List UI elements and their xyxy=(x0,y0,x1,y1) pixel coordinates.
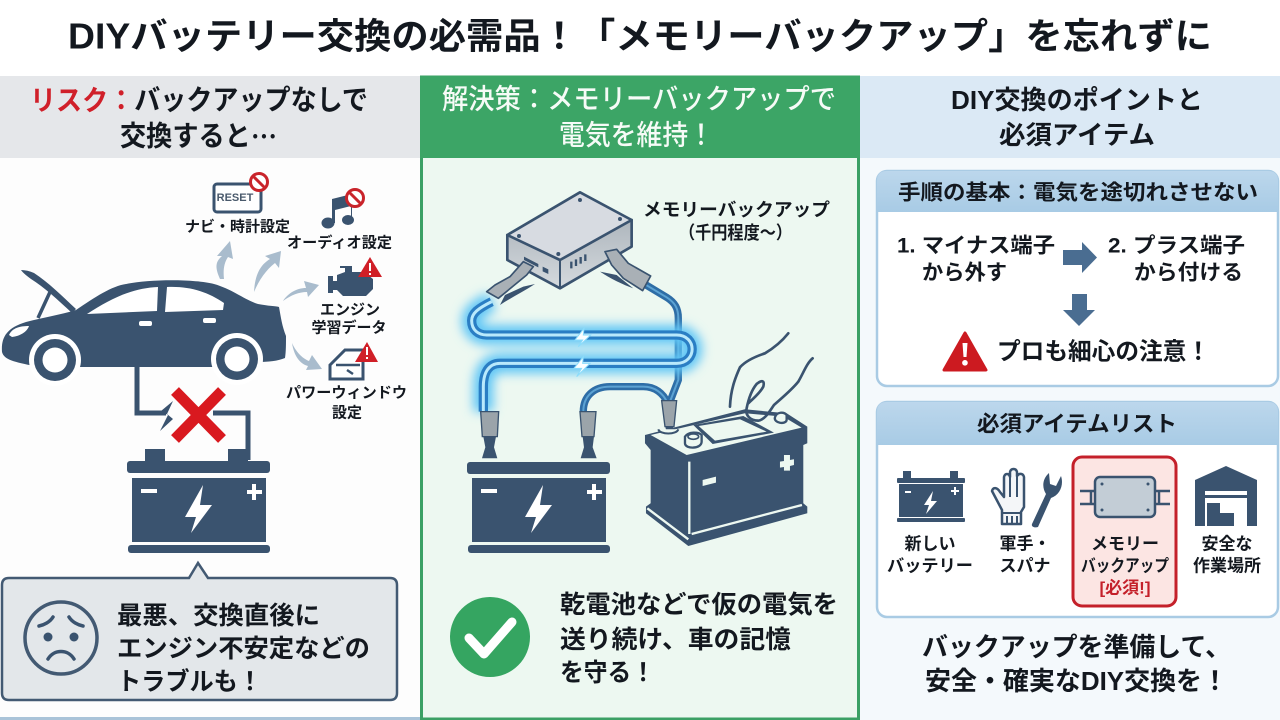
solution text: 乾電池などで仮の電気を xyxy=(560,591,838,619)
label: power window xyxy=(286,384,407,422)
item: new battery: バッテリー xyxy=(887,556,973,576)
right clamp xyxy=(600,272,633,288)
icon: sad face xyxy=(25,602,97,674)
caution text: プロも細心の注意！ xyxy=(997,338,1210,366)
items heading: 必須アイテムリスト xyxy=(977,412,1177,436)
DIY heading: DIY交換のポイントと xyxy=(951,85,1203,115)
item: safe workplace: 作業場所 xyxy=(1193,556,1261,576)
isometric battery with hand xyxy=(645,333,813,546)
card: procedure xyxy=(877,171,1278,386)
items heading xyxy=(877,402,1278,445)
item: gloves and wrench: 軍手・ xyxy=(1000,534,1050,554)
callout: worst case xyxy=(2,563,397,700)
solution text: を守る！ xyxy=(560,659,655,687)
solution heading: 電気を維持！ xyxy=(559,120,714,150)
label: memory backup xyxy=(643,200,830,243)
step 1 xyxy=(897,234,1055,284)
title: DIYバッテリー交換の必需品！「メモリーバックアップ」を忘れずに xyxy=(68,16,1212,56)
label: engine learning data: エンジン xyxy=(320,302,380,318)
label: audio: オーディオ設定 xyxy=(287,234,392,252)
step 1: から外す xyxy=(922,262,1007,284)
panel: solution xyxy=(420,76,860,719)
solution heading xyxy=(420,76,860,158)
solution text: 送り続け、車の記憶 xyxy=(560,626,791,654)
item: new battery: 新しい xyxy=(904,534,956,554)
label: engine learning data xyxy=(311,302,387,336)
item: gloves and wrench: スパナ xyxy=(1000,556,1050,576)
item: memory backup highlighted: [必須!] xyxy=(1100,578,1150,598)
step 2: から付ける xyxy=(1134,262,1243,284)
label: navigation and clock: ナビ・時計設定 xyxy=(185,218,290,236)
arrow: right xyxy=(1063,242,1097,273)
left clamp xyxy=(500,284,535,305)
icon: reset screen: RESET xyxy=(217,192,254,204)
procedure heading xyxy=(877,171,1278,212)
closing message: バックアップを準備して、 xyxy=(922,632,1231,662)
device body xyxy=(507,220,632,288)
risk heading xyxy=(0,76,420,158)
label: power window: パワーウィンドウ xyxy=(286,384,407,402)
callout: worst case: エンジン不安定などの xyxy=(117,635,370,663)
card: required items xyxy=(877,402,1278,617)
icon: warning xyxy=(944,333,986,370)
label: engine learning data: 学習データ xyxy=(311,318,387,336)
risk heading: 交換すると… xyxy=(120,116,277,156)
callout: worst case: トラブルも！ xyxy=(117,667,262,696)
DIY heading: 必須アイテム xyxy=(999,120,1155,150)
title xyxy=(0,0,1280,75)
item: memory backup highlighted: メモリー xyxy=(1091,534,1159,554)
label: memory backup: メモリーバックアップ xyxy=(643,200,830,220)
item: memory backup highlighted xyxy=(1073,457,1176,606)
icon: check circle xyxy=(450,597,530,677)
item: safe workplace: 安全な xyxy=(1202,534,1252,554)
car battery xyxy=(127,449,270,553)
step 2 xyxy=(1108,234,1245,284)
memory backup cables and device xyxy=(472,192,692,458)
solution text xyxy=(560,591,838,687)
car silhouette with open hood xyxy=(2,270,286,386)
plain cables xyxy=(583,283,678,412)
solution heading: 解決策：メモリーバックアップで xyxy=(442,84,836,114)
icon: music notes xyxy=(322,190,364,228)
callout: worst case: 最悪、交換直後に xyxy=(117,602,320,630)
battery and clips xyxy=(467,462,610,553)
arrows to affected settings xyxy=(216,241,322,370)
icon: reset screen xyxy=(214,174,268,212)
item: memory backup highlighted: バックアップ xyxy=(1081,556,1169,576)
glowing cable xyxy=(472,302,692,412)
item: new battery xyxy=(887,471,973,576)
item: gloves and wrench xyxy=(992,469,1062,576)
closing message: 安全・確実なDIY交換を！ xyxy=(925,666,1228,696)
procedure heading: 手順の基本：電気を途切れさせない xyxy=(898,182,1258,204)
disconnected wire with red cross xyxy=(137,367,248,460)
label: power window: 設定 xyxy=(332,404,362,422)
panel: risk xyxy=(0,76,420,720)
step 1: 1. マイナス端子 xyxy=(897,234,1055,258)
item: safe workplace xyxy=(1193,466,1261,576)
closing message xyxy=(922,632,1231,696)
panel: DIY points xyxy=(860,76,1280,720)
connectors xyxy=(481,401,677,437)
icon: power window door xyxy=(330,342,378,379)
icon: engine xyxy=(328,257,382,296)
DIY heading xyxy=(860,76,1280,158)
label: memory backup: （千円程度〜） xyxy=(679,223,792,243)
risk heading: リスク：バックアップなしで xyxy=(30,84,368,116)
arrow: down xyxy=(1063,294,1095,326)
step 2: 2. プラス端子 xyxy=(1108,234,1245,258)
